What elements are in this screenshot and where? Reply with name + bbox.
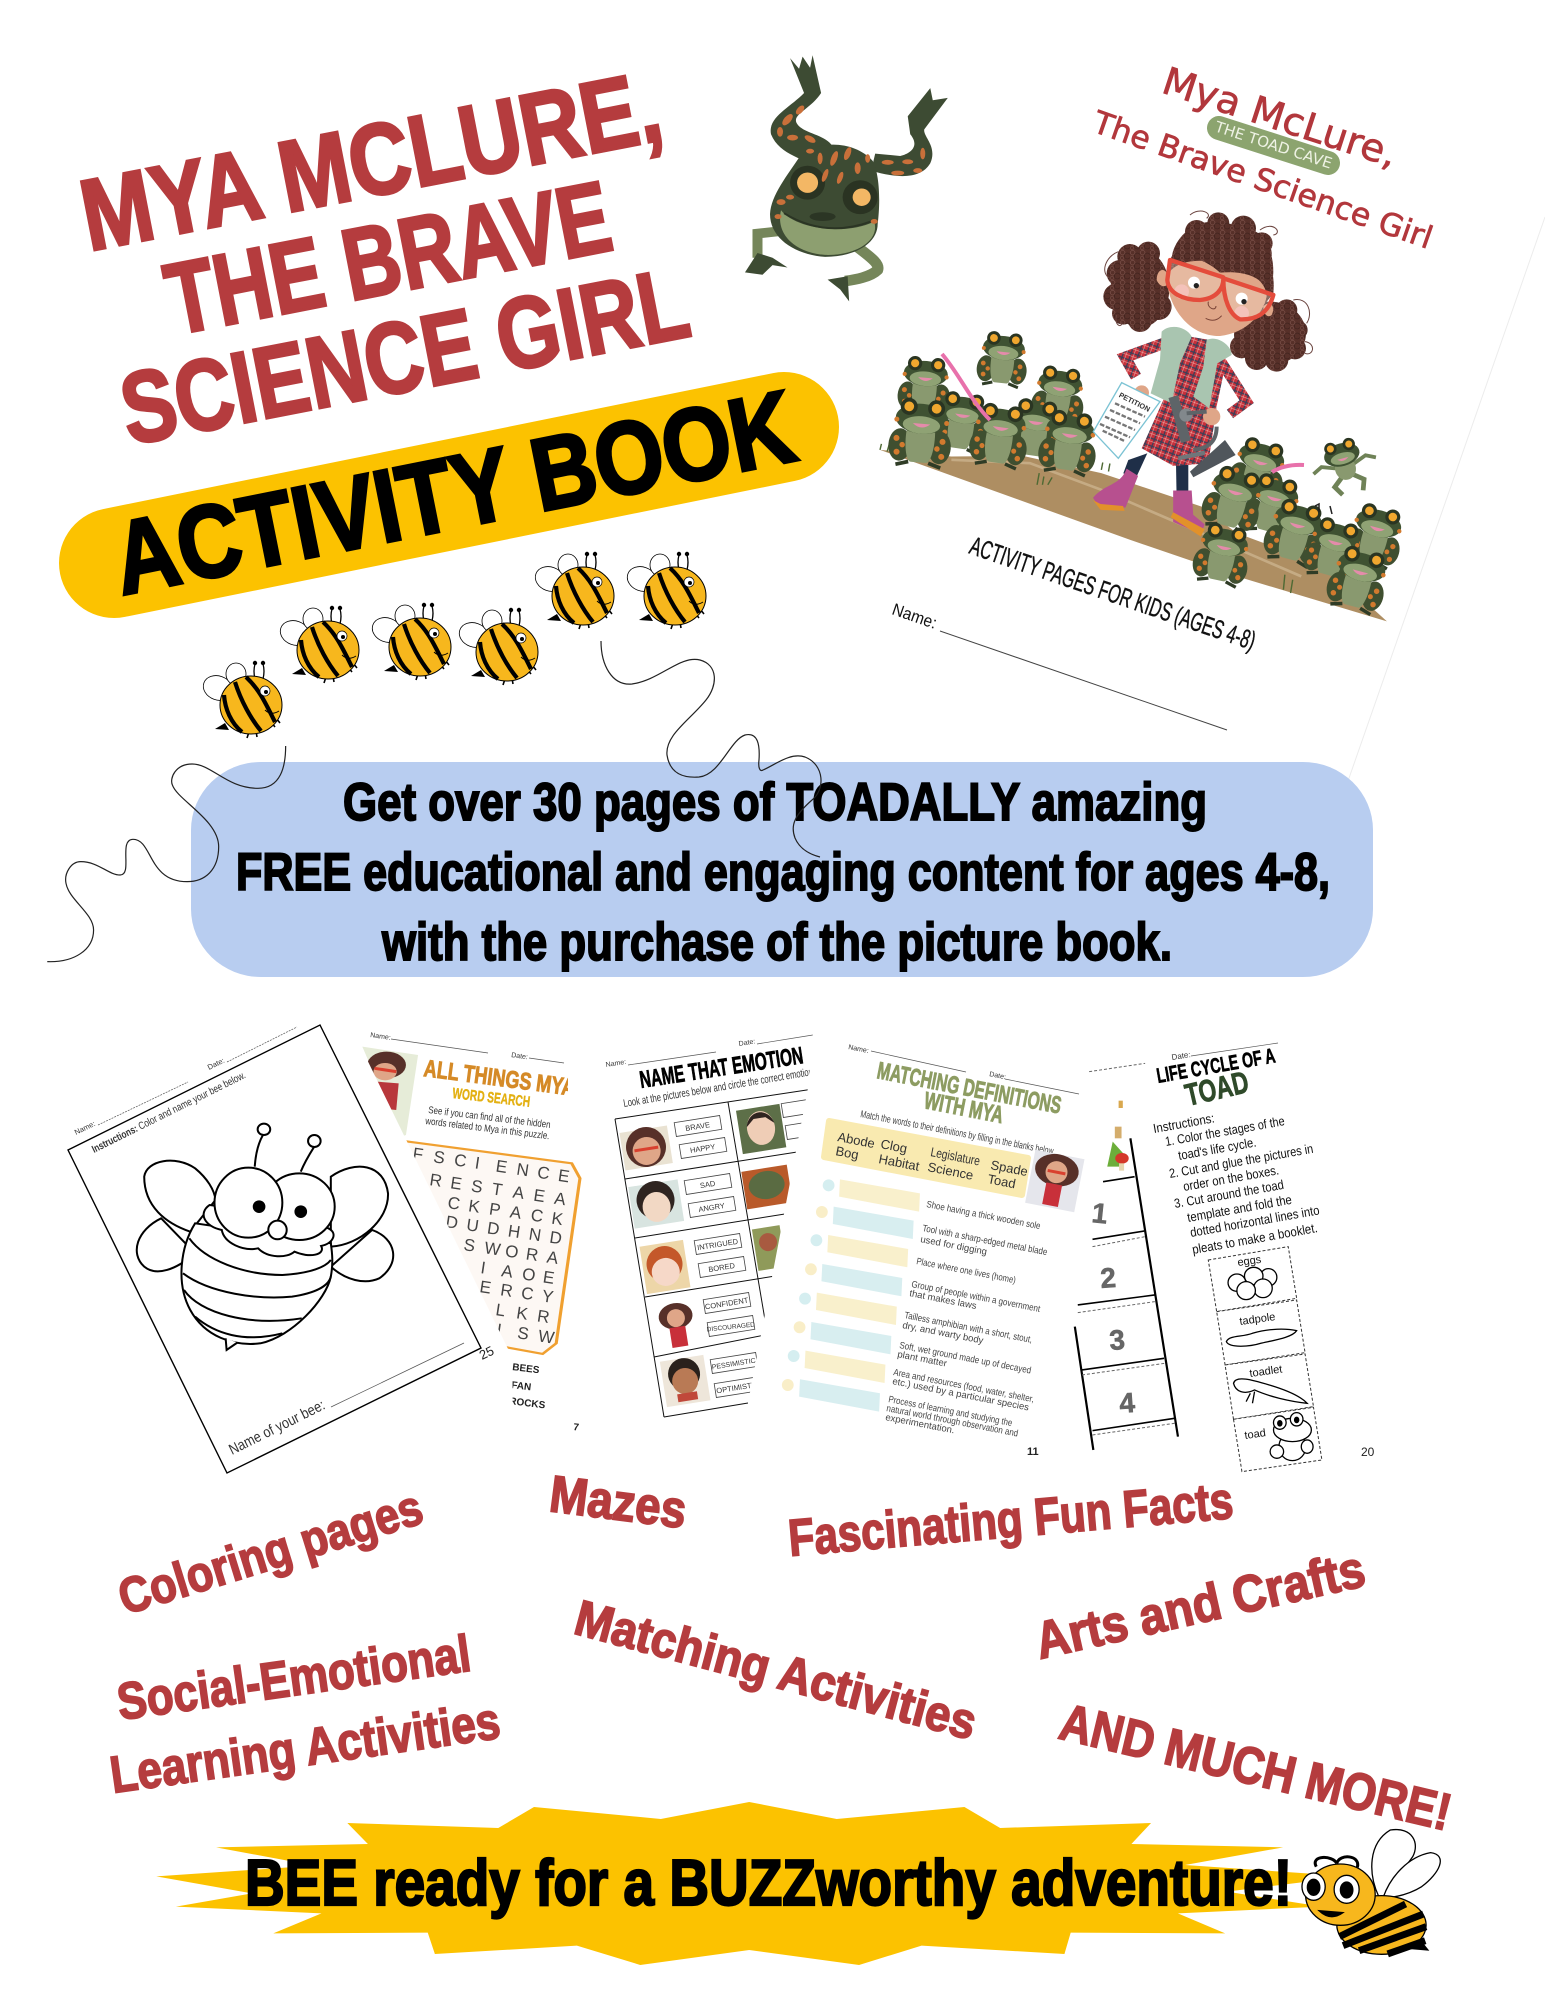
word list: -UL (440, 1387, 458, 1400)
heading (875, 1057, 1064, 1129)
answer blanks and dots (782, 1179, 920, 1412)
header fields (605, 1038, 756, 1069)
header fields: Date: (989, 1071, 1006, 1081)
definitions: Place where one lives (home) (915, 1256, 1017, 1286)
word bank: Clog (879, 1136, 909, 1156)
ground (880, 444, 1387, 621)
answer labels: INTRIGUED (697, 1237, 739, 1252)
icons: bee trail (200, 552, 706, 738)
header fields: Name: (73, 1119, 97, 1137)
callout banner: free pages: FREE educational and engaging content for ages 4-8, (236, 843, 1330, 902)
page number: 20 (1361, 1445, 1375, 1459)
header fields: Name: (848, 1044, 869, 1055)
word list: 7 (573, 1422, 580, 1434)
icon: jumping toad (745, 55, 948, 301)
stage labels: eggs (1237, 1254, 1263, 1269)
letter grid: RESTAEA (428, 1170, 568, 1209)
step numbers (1090, 1197, 1136, 1419)
label: mazes: Mazes (546, 1465, 690, 1540)
heading: LIFE CYCLE OF A (1155, 1044, 1277, 1088)
word search frame (379, 1141, 580, 1354)
character portraits (619, 1104, 793, 1407)
answer labels: DISCOURAGED (706, 1321, 756, 1334)
header fields: Name: (605, 1059, 627, 1069)
label: fun facts: Fascinating Fun Facts (786, 1472, 1235, 1568)
worksheet: name that emotion: Look at the pictures below and circle the correct emotion (622, 1066, 814, 1110)
icon: smiling bee (1302, 1830, 1440, 1954)
answer labels: CONFIDENT (704, 1296, 749, 1311)
definitions: etc.) used by a particular species (891, 1376, 1030, 1413)
answer labels (685, 1120, 760, 1395)
instructions: dotted horizontal lines into (1189, 1202, 1321, 1240)
title: Mya McLure, The Brave Science Girl: MYA MCLURE, (72, 50, 670, 273)
step numbers: 2 (1099, 1262, 1117, 1294)
burst callout: buzzworthy adventure (156, 1802, 1350, 1965)
header field: Date: (1171, 1050, 1191, 1062)
instructions (370, 1032, 551, 1142)
callout banner: free pages: Get over 30 pages of TOADALLY amazing (343, 773, 1207, 832)
instructions: toad's life cycle. (1177, 1134, 1257, 1163)
step numbers: 1 (1090, 1197, 1109, 1230)
instructions: template and fold the (1186, 1192, 1293, 1225)
definitions: used for digging (919, 1234, 988, 1258)
definitions: Shoe having a thick wooden sole (925, 1199, 1041, 1232)
label: social-emotional learning (107, 1625, 504, 1805)
word list: BEES (512, 1362, 540, 1376)
definitions: Tailless amphibian with a short, stout, (903, 1310, 1033, 1346)
definitions: Area and resources (food, water, shelter, (892, 1367, 1035, 1405)
instructions: 3. Cut around the toad (1173, 1177, 1285, 1211)
badge: The Toad Cave: THE TOAD CAVE (1212, 117, 1334, 173)
answer boxes (674, 1096, 833, 1398)
worksheet: toad booklet strip (1075, 1063, 1178, 1450)
label: matching activities: Matching Activities (569, 1590, 983, 1751)
instructions: 1. Color the stages of the (1164, 1113, 1286, 1149)
definitions: Group of people within a government (910, 1279, 1041, 1315)
flight path: centre squiggle (601, 641, 821, 857)
letter grid: DUDHND (444, 1212, 563, 1248)
answer labels: SAD (699, 1179, 717, 1190)
word list: ROCKS (509, 1396, 546, 1411)
cover title: The Brave Science Girl (1087, 104, 1437, 257)
overlap mask beside emotion page (748, 1010, 1130, 1470)
letter grid: FSCIENCE (411, 1144, 571, 1186)
mushroom sprite (1107, 1101, 1129, 1171)
answer labels: BRAVE (685, 1120, 711, 1133)
page edge (1348, 217, 1545, 781)
word bank: Bog (834, 1143, 860, 1162)
header fields: Date: (738, 1038, 756, 1048)
starburst (156, 1802, 1350, 1965)
word bank: Toad (986, 1171, 1017, 1191)
letter grid: CKPACK (446, 1193, 565, 1229)
heading: MATCHING DEFINITIONS (875, 1057, 1064, 1120)
instructions: words related to Mya in this puzzle. (424, 1116, 550, 1142)
header fields: Instructions: Color and name your bee below. (90, 1069, 248, 1156)
answer labels: HAPPY (689, 1142, 716, 1155)
letter grid: SWORA (462, 1235, 560, 1268)
illustration: pink boots (1093, 469, 1205, 537)
feature list (107, 1465, 1457, 1842)
instructions: See if you can find all of the hidden (428, 1105, 551, 1131)
cover title: Mya McLure, (1157, 59, 1403, 176)
title: Mya McLure, The Brave Science Girl: SCIENCE GIRL (112, 247, 698, 467)
letter grid: IAOE (479, 1258, 556, 1288)
instructions: 2. Cut and glue the pictures in (1168, 1141, 1314, 1181)
word bank: Habitat (877, 1151, 921, 1174)
letter grid: ISW (495, 1320, 556, 1348)
name field (890, 600, 1227, 730)
definitions: that makes laws (908, 1288, 978, 1312)
heading: WITH MYA (922, 1087, 1006, 1129)
label: and much more: AND MUCH MORE! (1054, 1693, 1457, 1842)
page number: 11 (1027, 1446, 1039, 1458)
word bank: Abode (836, 1129, 876, 1151)
definitions: experimentation. (884, 1412, 955, 1436)
word bank: Legislature (929, 1144, 981, 1168)
label: arts and crafts: Arts and Crafts (1030, 1540, 1370, 1671)
word bank (824, 1121, 1029, 1195)
word list: FAN (511, 1380, 532, 1393)
definitions: Process of learning and studying the (887, 1394, 1013, 1429)
stage labels: tadpole (1239, 1311, 1276, 1328)
illustration: toads on the right (1189, 432, 1410, 617)
stage labels: toad (1244, 1427, 1267, 1442)
step numbers: 3 (1108, 1324, 1126, 1356)
worksheet: word search (362, 1032, 580, 1434)
worksheet: name that emotion (605, 1034, 833, 1417)
instructions: Date: (511, 1052, 528, 1061)
answer labels: OPTIMISTIC (716, 1380, 760, 1395)
label: coloring pages: Coloring pages (112, 1479, 429, 1626)
definitions: plant matter (896, 1349, 948, 1370)
worksheet: matching definitions: Match the words to their definitions by filling in the blanks below. (859, 1109, 1056, 1158)
worksheet: coloring page (68, 1025, 496, 1473)
illustration: Mya McLure: PETITION (1117, 390, 1152, 414)
flight path: left squiggle (47, 746, 286, 962)
word bank: Spade (989, 1157, 1029, 1179)
name field: Name: (890, 600, 939, 633)
stage labels (1237, 1254, 1283, 1442)
cut-out boxes and stage drawings (1208, 1247, 1322, 1472)
overlap mask beside coloring page (40, 1000, 513, 1483)
callout banner: free pages: with the purchase of the picture book. (381, 913, 1172, 972)
title: Mya McLure, The Brave Science Girl (72, 50, 698, 467)
header fields: Date: (206, 1056, 226, 1072)
page number: 25 (477, 1343, 496, 1363)
panel: activity book cover (880, 59, 1545, 781)
header fields (848, 1044, 1006, 1081)
illustration: Mya McLure (1093, 211, 1313, 500)
bee name field: Name of your bee: (226, 1397, 328, 1459)
worksheet: matching definitions (782, 1044, 1085, 1458)
yellow pill: Activity Book: ACTIVITY BOOK (104, 368, 804, 617)
answer labels: BORED (708, 1261, 736, 1274)
definitions: natural world through observation and (885, 1403, 1019, 1440)
character portrait (1025, 1150, 1085, 1212)
page outline (68, 1025, 481, 1473)
illustration: toads on the left (887, 330, 1101, 477)
letter grid: LKR (494, 1300, 551, 1327)
worksheet: life cycle of a toad (1152, 1043, 1375, 1472)
definitions: Tool with a sharp-edged metal blade (921, 1223, 1048, 1258)
instructions: pleats to make a booklet. (1191, 1220, 1319, 1257)
answer labels: ANGRY (698, 1201, 725, 1214)
definitions: Soft, wet ground made up of decayed (898, 1340, 1032, 1377)
header photo (362, 1047, 418, 1137)
stage labels: toadlet (1249, 1363, 1283, 1380)
label: social-emotional learning: Social-Emotional (114, 1625, 474, 1732)
instructions: Instructions: (1152, 1110, 1216, 1136)
worksheet title: ALL THINGS MYA (422, 1055, 576, 1102)
letter grid (411, 1144, 571, 1348)
instructions: order on the boxes. (1182, 1162, 1280, 1194)
instructions (1152, 1110, 1321, 1257)
subtitle: activity pages: ACTIVITY PAGES FOR KIDS (AGES 4-8) (966, 530, 1260, 656)
instructions: Name: (370, 1032, 391, 1042)
answer labels: PESSIMISTIC (711, 1358, 756, 1371)
letter grid: ERCY (478, 1277, 555, 1307)
word list (440, 1362, 580, 1434)
line art bee (137, 1124, 393, 1350)
title: Mya McLure, The Brave Science Girl: THE BRAVE (157, 161, 620, 357)
worksheet: word search: WORD SEARCH (452, 1085, 531, 1111)
heading: NAME THAT EMOTION (638, 1042, 805, 1094)
step numbers: 4 (1118, 1387, 1136, 1419)
word bank: Science (926, 1159, 975, 1183)
worksheet: life cycle of a toad: TOAD (1182, 1064, 1252, 1113)
definitions (884, 1199, 1048, 1440)
strip frame (1075, 1063, 1178, 1450)
callout banner: free pages (191, 762, 1373, 977)
grid lines (615, 1088, 820, 1417)
burst callout: buzzworthy adventure: BEE ready for a BUZZworthy adventure! (245, 1846, 1292, 1919)
definitions: dry, and warty body (901, 1320, 984, 1347)
label: social-emotional learning: Learning Activities (107, 1692, 504, 1805)
